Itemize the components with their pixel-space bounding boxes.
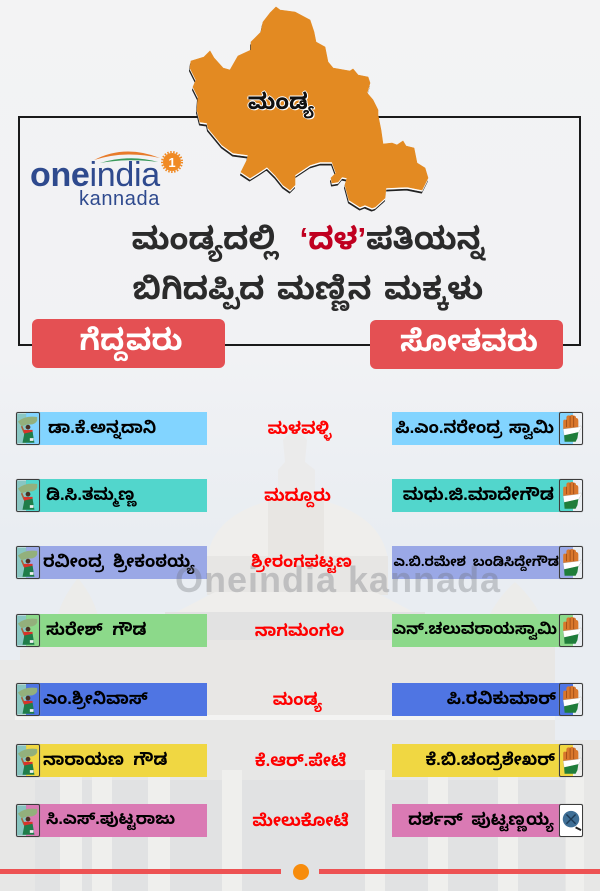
title: ಮಂಡ್ಯದಲ್ಲಿ ‘ದಳ’ಪತಿಯನ್ನ [132,221,484,256]
row 5: Mandya: ಎಂ.ಶ್ರೀನಿವಾಸ್ [43,689,148,708]
row 4: Nagamangala [16,614,584,648]
row 6: KR Pete: ಕೆ.ಆರ್.ಪೇಟೆ [255,751,346,770]
main body [165,612,425,652]
header frame [18,116,581,346]
heading: losers: ಸೋತವರು [400,325,538,358]
row 2: Maddur: ಮಧು.ಜಿ.ಮಾದೇಗೌಡ [403,485,554,504]
row 2: Maddur: ಡಿ.ಸಿ.ತಮ್ಮಣ್ಣ [46,485,136,504]
row 6: KR Pete: ನಾರಾಯಣ ಗೌಡ [43,750,167,769]
title: ಬಿಗಿದಪ್ಪಿದ ಮಣ್ಣಿನ ಮಕ್ಕಳು [133,271,483,306]
row 5: Mandya: ಪಿ.ರವಿಕುಮಾರ್ [447,689,556,708]
row 6: KR Pete: ಕೆ.ಬಿ.ಚಂದ್ರಶೇಖರ್ [425,750,555,769]
row 6: KR Pete [16,744,584,778]
row 3: Srirangapatna: ರವೀಂದ್ರ ಶ್ರೀಕಂಠಯ್ಯ [43,552,195,571]
heading: winners: ಗೆದ್ದವರು [79,324,183,357]
map label: ಮಂಡ್ಯ [248,89,314,114]
row 2: Maddur [16,478,584,512]
finial and lantern [278,432,315,505]
logo: oneindia kannada: oneindia [30,156,160,194]
row 4: Nagamangala: ಸುರೇಶ್ ಗೌಡ [46,620,146,639]
row 2: Maddur: ಮದ್ದೂರು [264,486,331,505]
footer line with dot [0,864,600,880]
row 4: Nagamangala: ನಾಗಮಂಗಲ [255,621,344,640]
row 5: Mandya: ಮಂಡ್ಯ [273,690,322,709]
heading: winners [32,319,225,368]
row 1: Malavalli: ಡಾ.ಕೆ.ಅನ್ನದಾನಿ [48,418,156,437]
row 3: Srirangapatna [16,546,584,580]
logo: oneindia kannada: kannada [79,188,160,210]
row 1: Malavalli [16,412,584,446]
row 7: Melukote: ಮೇಲುಕೋಟೆ [252,811,349,830]
side domes [55,578,100,625]
row 3: Srirangapatna: ಶ್ರೀರಂಗಪಟ್ಟಣ [251,553,352,571]
row 7: Melukote: ದರ್ಶನ್ ಪುಟ್ಟಣ್ಣಯ್ಯ [408,810,554,829]
dome [207,500,388,560]
watermark: Oneindia kannada [175,559,501,600]
row 3: Srirangapatna: ಎ.ಬಿ.ರಮೇಶ ಬಂಡಿಸಿದ್ದೇಗೌಡ [393,554,559,569]
logo: oneindia kannada: 1 [168,155,176,170]
map of Mandya [189,6,428,212]
logo: oneindia kannada [30,151,183,210]
title [132,221,486,311]
heading: losers [370,320,563,369]
row 7: Melukote [16,804,584,838]
row 7: Melukote: ಸಿ.ಎಸ್.ಪುಟ್ಟರಾಜು [46,810,175,828]
row 5: Mandya [16,682,584,716]
row 1: Malavalli: ಪಿ.ಎಂ.ನರೇಂದ್ರ ಸ್ವಾಮಿ [395,418,554,437]
row 1: Malavalli: ಮಳವಳ್ಳಿ [268,419,331,438]
row 4: Nagamangala: ಎನ್.ಚಲುವರಾಯಸ್ವಾಮಿ [393,621,557,638]
